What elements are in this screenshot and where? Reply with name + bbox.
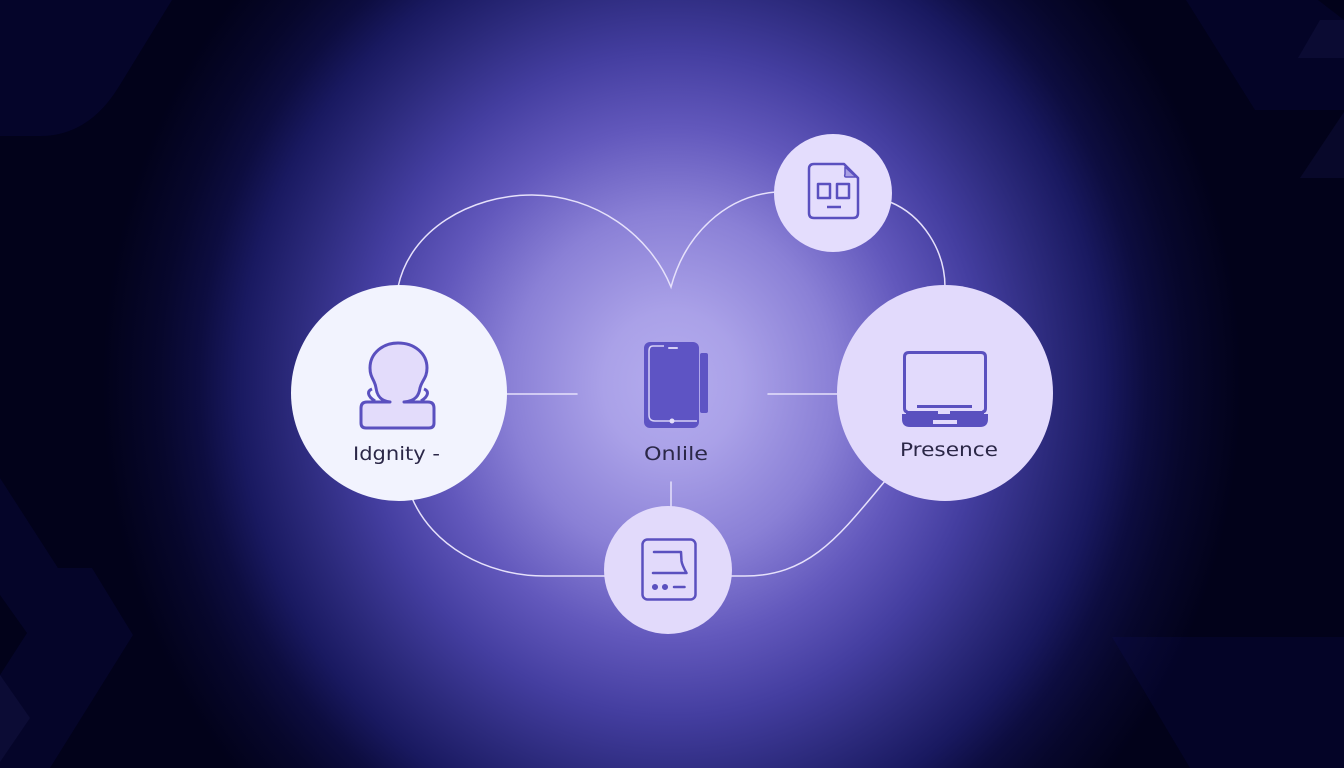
background shape: bottom right xyxy=(1112,637,1344,768)
node: Presence xyxy=(837,285,1053,501)
icon: card xyxy=(642,540,696,600)
label: Onlile: Onlile xyxy=(644,443,708,465)
node: card xyxy=(604,506,732,634)
node: Online xyxy=(644,342,708,465)
background shapes: top right xyxy=(1186,0,1344,178)
label: Idgnity: Idgnity - xyxy=(353,443,440,465)
node: document xyxy=(774,134,892,252)
background shape: top left xyxy=(0,0,172,136)
icon: person xyxy=(361,343,434,428)
icon: phone xyxy=(644,342,708,428)
icon: laptop xyxy=(902,352,988,427)
node: Identity xyxy=(291,285,507,501)
label: Presence: Presence xyxy=(900,439,998,461)
background shapes: bottom left xyxy=(0,478,133,768)
connector lines xyxy=(398,192,945,576)
icon: document face xyxy=(809,164,858,218)
